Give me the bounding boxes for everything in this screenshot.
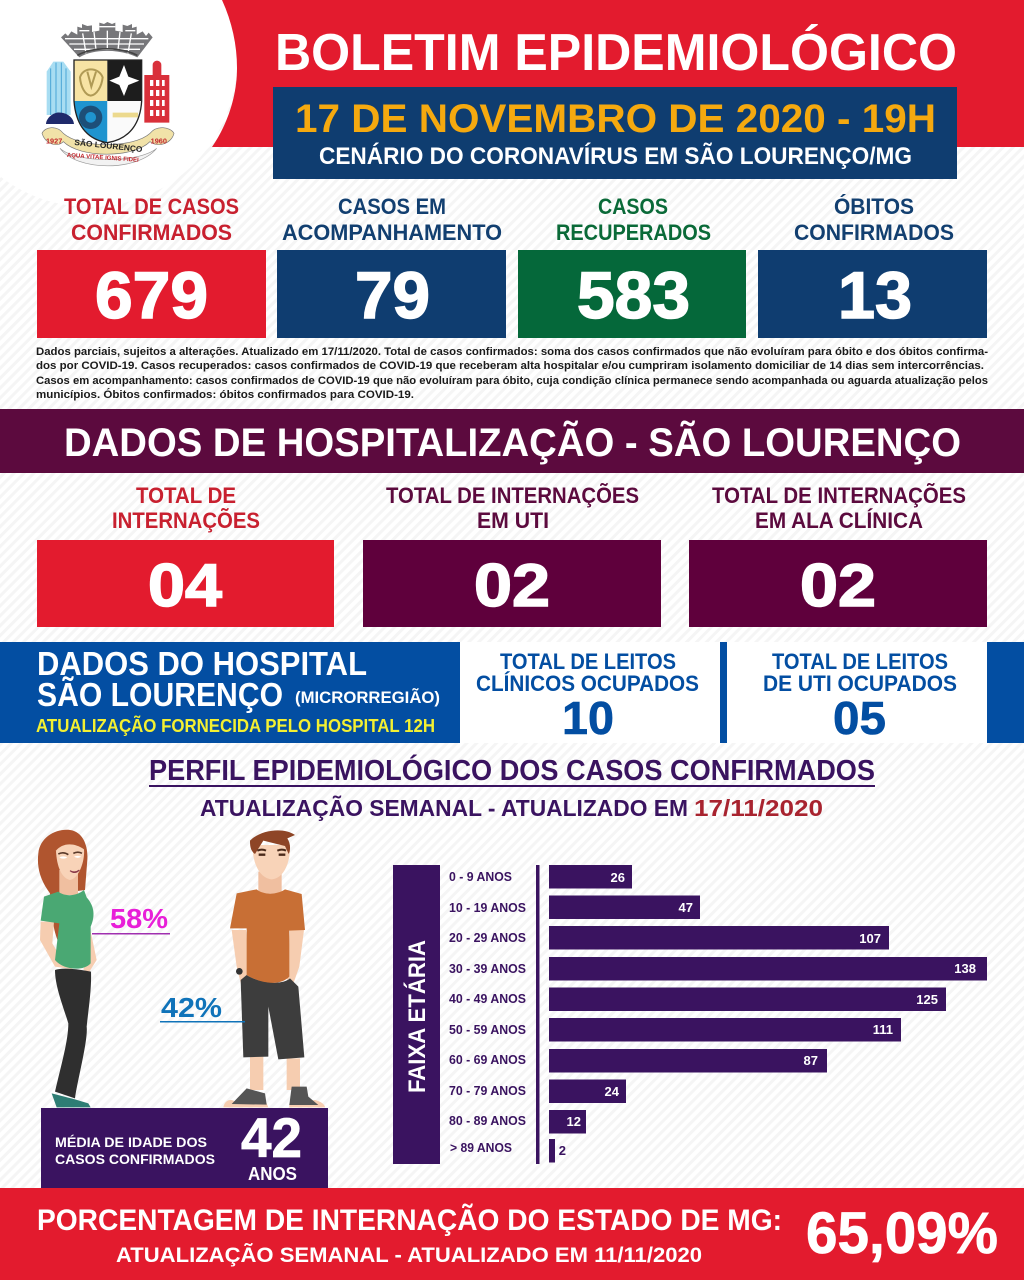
crest motto: AQUA VITAE IGNIS FIDEI	[67, 153, 139, 164]
label: ÓBITOS	[834, 194, 914, 219]
bar values: 24	[605, 1084, 620, 1099]
icon: municipal coat of arms	[42, 22, 174, 166]
footnote text block: dos por COVID-19. Casos recuperados: casos confirmados de COVID-19 que receberam alta hospitalar e/ou cumpriram isolamento domiciliar de 14 dias sem intercorrências.	[36, 360, 984, 372]
header banner	[212, 0, 1024, 147]
bar values	[559, 870, 976, 1158]
bar values: 138	[954, 961, 976, 976]
age labels: 80 - 89 ANOS	[449, 1114, 526, 1128]
stat: leitos de UTI: DE UTI OCUPADOS	[763, 671, 957, 696]
bar values: 12	[567, 1114, 581, 1129]
label: CASOS	[598, 194, 668, 219]
label line 2: EM ALA CLÍNICA	[755, 508, 923, 533]
panel: total de casos confirmados	[37, 194, 266, 338]
stat: 42% men	[160, 992, 245, 1023]
footnote text block	[36, 346, 988, 401]
microrregião note: (MICRORREGIÃO)	[295, 687, 440, 707]
title: BOLETIM EPIDEMIOLÓGICO	[275, 24, 957, 82]
panel: total de internações	[37, 483, 334, 627]
crest motto year right: 1960	[151, 136, 167, 145]
footnote text block: Dados parciais, sujeitos a alterações. Atualizado em 17/11/2020. Total de casos confirmados: soma dos casos confirmados que não evoluíram para óbito e dos óbitos confirma-	[36, 346, 988, 358]
bar values: 2	[559, 1143, 566, 1158]
age labels: 60 - 69 ANOS	[449, 1053, 526, 1067]
bar values: 107	[859, 931, 881, 946]
stat: leitos de UTI: 05	[833, 692, 886, 744]
stat: 58% women: 58%	[110, 903, 168, 934]
icon: woman figure	[38, 830, 97, 1107]
bar values: 47	[679, 900, 693, 915]
age labels: 20 - 29 ANOS	[449, 931, 526, 945]
label line 2: ACOMPANHAMENTO	[282, 220, 502, 245]
label line 2: INTERNAÇÕES	[112, 508, 260, 533]
age labels: > 89 ANOS	[450, 1141, 512, 1155]
update note: ATUALIZAÇÃO FORNECIDA PELO HOSPITAL 12H	[36, 715, 435, 736]
label: TOTAL DE CASOS	[64, 194, 239, 219]
number: 583	[577, 258, 690, 332]
crest city name: SÃO LOURENÇO	[74, 138, 143, 154]
number: 04	[148, 552, 223, 619]
caption line 2: CASOS CONFIRMADOS	[55, 1151, 215, 1167]
age labels: 30 - 39 ANOS	[449, 962, 526, 976]
stat: leitos clínicos: 10	[562, 692, 614, 744]
axis title: FAIXA ETÁRIA	[403, 940, 431, 1093]
axis title	[393, 865, 440, 1164]
number: 79	[355, 258, 430, 332]
label: TOTAL DE INTERNAÇÕES	[386, 483, 639, 508]
footer band	[0, 1188, 1024, 1280]
caption: MÉDIA DE IDADE DOS	[55, 1134, 207, 1150]
panel: média de idade	[41, 1106, 328, 1188]
label line 2: EM UTI	[477, 508, 549, 533]
bar values: 87	[804, 1053, 818, 1068]
scenario subtitle: CENÁRIO DO CORONAVÍRUS EM SÃO LOURENÇO/MG	[319, 142, 912, 170]
hospitalization heading band	[0, 409, 1024, 473]
bar values: 125	[916, 992, 938, 1007]
footer heading: PORCENTAGEM DE INTERNAÇÃO DO ESTADO DE MG:	[37, 1203, 782, 1237]
hospital name: SÃO LOURENÇO	[37, 676, 283, 713]
crest motto year left: 1927	[46, 136, 62, 145]
footer percentage: 65,09%	[806, 1201, 998, 1266]
age labels: 40 - 49 ANOS	[449, 992, 526, 1006]
number: 02	[474, 552, 550, 619]
unit: ANOS	[248, 1164, 297, 1184]
heading text: DADOS DE HOSPITALIZAÇÃO - SÃO LOURENÇO	[64, 419, 961, 465]
bar values: 26	[611, 870, 625, 885]
label line 2: RECUPERADOS	[556, 220, 711, 245]
label: TOTAL DE	[136, 483, 236, 508]
label line 2: CONFIRMADOS	[794, 220, 954, 245]
icon: man figure	[223, 830, 325, 1107]
panel: casos recuperados	[518, 194, 746, 338]
number: 679	[95, 258, 208, 332]
age labels: 0 - 9 ANOS	[449, 870, 512, 884]
stat: leitos de UTI	[763, 649, 957, 744]
date panel	[273, 87, 957, 179]
number: 42	[241, 1106, 302, 1169]
bar chart: faixa etária	[393, 865, 987, 1164]
stat: leitos de UTI: TOTAL DE LEITOS	[772, 649, 948, 674]
profile subheading: ATUALIZAÇÃO SEMANAL - ATUALIZADO EM	[200, 794, 688, 821]
panel: internações em UTI	[363, 483, 661, 627]
profile subheading: 17/11/2020	[694, 795, 823, 821]
date heading: 17 DE NOVEMBRO DE 2020 - 19H	[295, 97, 936, 141]
stat: 42% men: 42%	[161, 992, 222, 1023]
label: CASOS EM	[338, 194, 446, 219]
age labels: 10 - 19 ANOS	[449, 901, 526, 915]
age labels: 50 - 59 ANOS	[449, 1023, 526, 1037]
stat: leitos clínicos	[476, 649, 699, 744]
footnote text block: Casos em acompanhamento: casos confirmados de COVID-19 que não evoluíram para óbito, cuja condição clínica permanece sendo acompanhada ou aguarda atualização pelos	[36, 375, 988, 387]
label line 2: CONFIRMADOS	[71, 220, 232, 245]
age labels	[449, 870, 526, 1155]
stat: leitos clínicos: CLÍNICOS OCUPADOS	[476, 671, 699, 696]
footer update note: ATUALIZAÇÃO SEMANAL - ATUALIZADO EM 11/11/2020	[116, 1244, 702, 1267]
hospital heading: DADOS DO HOSPITAL	[37, 645, 367, 682]
panel: casos em acompanhamento	[277, 194, 506, 338]
panel: dados do hospital	[0, 642, 1024, 744]
number: 13	[838, 258, 912, 332]
bar values: 111	[873, 1022, 893, 1037]
profile heading: PERFIL EPIDEMIOLÓGICO DOS CASOS CONFIRMADOS	[149, 753, 875, 787]
bars	[549, 865, 987, 1162]
panel: óbitos confirmados	[758, 194, 987, 338]
panel: internações em ala clínica	[689, 483, 987, 627]
stat: leitos clínicos: TOTAL DE LEITOS	[500, 649, 676, 674]
age labels: 70 - 79 ANOS	[449, 1084, 526, 1098]
label: TOTAL DE INTERNAÇÕES	[712, 483, 966, 508]
number: 02	[800, 552, 876, 619]
footnote text block: municípios. Óbitos confirmados: óbitos confirmados para COVID-19.	[36, 388, 414, 401]
